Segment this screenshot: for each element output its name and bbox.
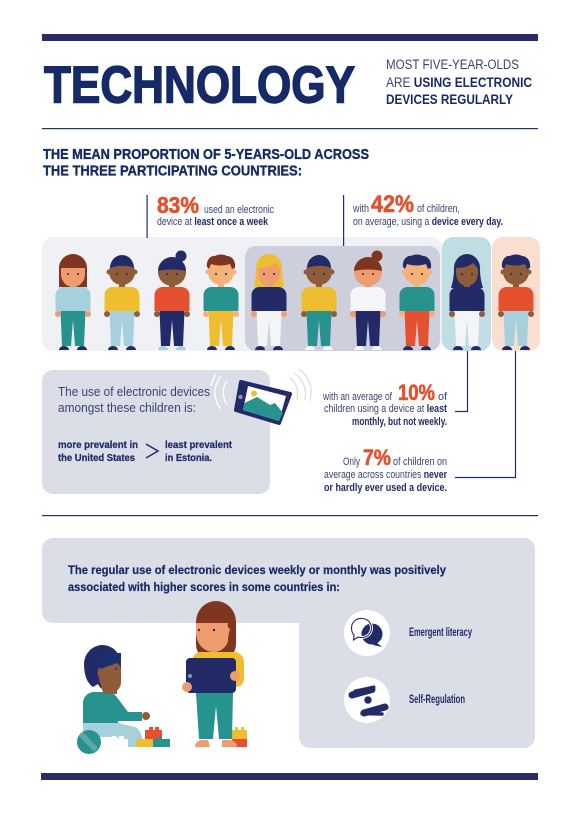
callout: 42%: with	[352, 203, 369, 215]
subtitle: DEVICES REGULARLY	[386, 92, 513, 107]
prevalence text: in Estonia.	[165, 452, 212, 464]
heading: THE THREE PARTICIPATING COUNTRIES:	[43, 164, 302, 180]
prevalence text: least prevalent	[165, 439, 232, 451]
panel: never	[492, 237, 540, 351]
callout: 10%: with an average of	[322, 391, 393, 403]
icon: speech bubbles	[344, 610, 390, 656]
child 4	[203, 254, 239, 350]
label: emergent literacy: Emergent literacy	[409, 627, 472, 639]
callout: 42%: on average, using a device every day.	[353, 216, 503, 228]
child 8	[399, 254, 435, 350]
subtitle: ARE USING ELECTRONIC	[386, 75, 532, 90]
icon: greater than	[146, 444, 158, 458]
callout: 42%: of children,	[417, 203, 460, 215]
callout: 83%	[146, 192, 274, 238]
callout: 10%: of	[438, 391, 448, 403]
prevalence text: more prevalent in	[58, 439, 138, 451]
callout: 7%	[324, 445, 448, 494]
association heading: associated with higher scores in some countries in:	[68, 580, 340, 594]
callout: 10%: 10%	[398, 380, 435, 405]
callout: 7%: average across countries never	[324, 469, 448, 481]
prevalence text: The use of electronic devices	[58, 385, 210, 399]
child 5	[251, 254, 287, 350]
label: self-regulation: Self-Regulation	[409, 694, 465, 706]
heading	[43, 147, 369, 180]
prevalence text	[58, 385, 232, 464]
callout: 83%: device at least once a week	[157, 216, 269, 228]
panel: monthly	[442, 237, 491, 351]
panel: people	[42, 237, 442, 351]
callout: 10%: children using a device at least	[324, 403, 447, 415]
illustration: child with tablet	[182, 601, 247, 747]
child 10	[498, 254, 534, 350]
association heading: The regular use of electronic devices weekly or monthly was positively	[68, 563, 446, 577]
association heading	[68, 563, 446, 594]
child 9	[449, 254, 485, 350]
icon: hands	[344, 677, 390, 723]
child 3	[154, 250, 190, 350]
heading: THE MEAN PROPORTION OF 5-YEARS-OLD ACROSS	[43, 147, 369, 163]
arrow: never connector	[455, 351, 516, 478]
callout: 10%	[322, 380, 448, 428]
bottom bar	[41, 773, 538, 780]
callout: 83%: used an electronic	[204, 204, 274, 216]
arrow: monthly connector	[455, 351, 468, 412]
panel: daily group	[245, 246, 440, 351]
callout: 42%	[343, 191, 503, 246]
prevalence text: the United States	[58, 452, 135, 464]
top bar	[42, 34, 538, 41]
child 1	[55, 254, 91, 350]
panel: prevalence	[42, 370, 270, 494]
callout: 7%: 7%	[363, 445, 391, 470]
panel: association	[42, 538, 535, 748]
callout: 42%: 42%	[371, 191, 414, 218]
title: TECHNOLOGY	[44, 56, 355, 114]
callout: 10%: monthly, but not weekly.	[352, 416, 447, 428]
icon: tablet	[211, 369, 311, 423]
subtitle: MOST FIVE-YEAR-OLDS	[386, 57, 519, 72]
callout: 7%: or hardly ever used a device.	[324, 482, 447, 494]
illustration: playing child	[77, 645, 170, 754]
callout: 83%: 83%	[157, 192, 199, 218]
subtitle	[386, 57, 532, 107]
child 6	[301, 255, 337, 350]
prevalence text: amongst these children is:	[58, 401, 196, 415]
callout: 7%: Only	[343, 456, 360, 468]
child 7	[350, 250, 386, 350]
callout: 7%: of children on	[393, 456, 447, 468]
child 2	[104, 255, 140, 350]
